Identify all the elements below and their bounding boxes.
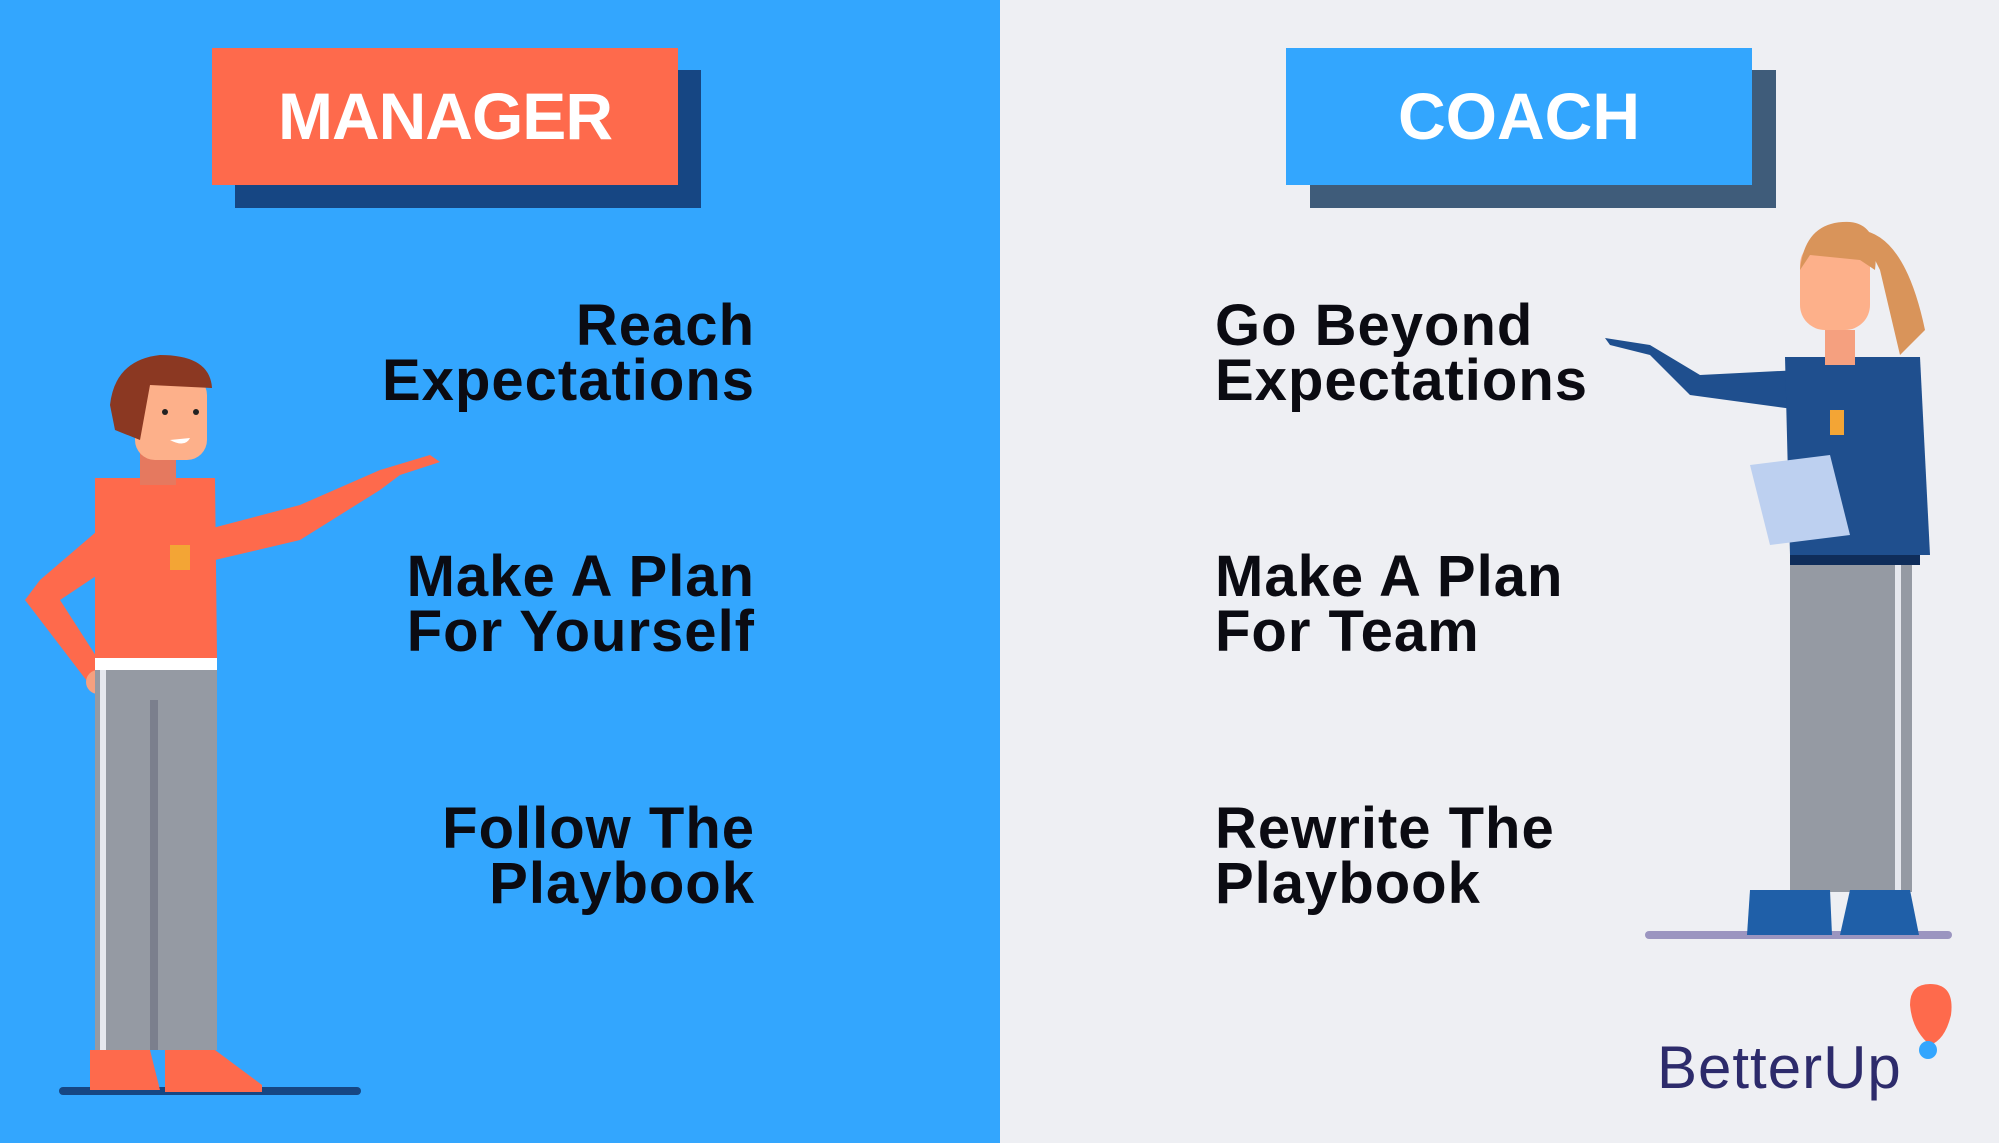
- text: reach expectations: Expectations: [382, 348, 755, 413]
- text: make a plan for yourself: [407, 544, 755, 664]
- text: make a plan for team: [1215, 544, 1563, 664]
- heading: manager: [212, 48, 701, 208]
- panel: coach: [1000, 0, 1999, 1143]
- text: follow the playbook: [442, 796, 755, 916]
- logo: betterup: [1657, 984, 1952, 1101]
- heading: manager: MANAGER: [278, 79, 612, 153]
- logo: betterup: BetterUp: [1657, 1034, 1902, 1101]
- heading: coach: [1286, 48, 1776, 208]
- text: make a plan for team: Make A Plan: [1215, 544, 1563, 609]
- text: go beyond expectations: Go Beyond: [1215, 293, 1533, 358]
- text: make a plan for team: For Team: [1215, 599, 1480, 664]
- text: follow the playbook: Follow The: [442, 796, 755, 861]
- text: reach expectations: [382, 293, 755, 413]
- text: reach expectations: Reach: [576, 293, 755, 358]
- heading: coach: COACH: [1398, 79, 1640, 153]
- text: follow the playbook: Playbook: [489, 851, 755, 916]
- text: rewrite the playbook: Rewrite The: [1215, 796, 1555, 861]
- illustration: coach figure: [1605, 222, 1952, 939]
- text: go beyond expectations: Expectations: [1215, 348, 1588, 413]
- text: make a plan for yourself: Make A Plan: [407, 544, 755, 609]
- text: rewrite the playbook: [1215, 796, 1555, 916]
- text: go beyond expectations: [1215, 293, 1588, 413]
- panel: manager: [0, 0, 1000, 1143]
- illustration: manager figure: [25, 355, 440, 1095]
- text: make a plan for yourself: For Yourself: [407, 599, 755, 664]
- text: rewrite the playbook: Playbook: [1215, 851, 1481, 916]
